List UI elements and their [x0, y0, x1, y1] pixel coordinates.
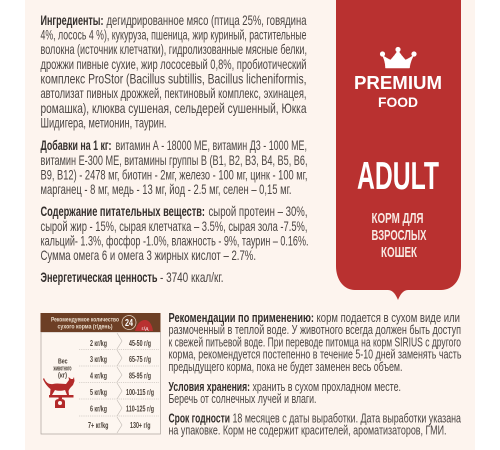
additives text: В9, В12) - 2478 мг, биотин - 2мг, железо - 100 мг, цинк - 100 мг,	[40, 166, 308, 182]
grams column: 85-95 г/g	[129, 370, 151, 380]
ingredients text: автолизат пивных дрожжей, пектиновый комплекс, эхинацея,	[40, 85, 306, 101]
usage recommendations	[168, 311, 462, 374]
left column label: Вес	[58, 356, 68, 366]
additives text: Добавки на 1 кг:	[40, 137, 112, 153]
ingredients text: дрожжи пивные сухие, жир лососевый 0,8%, пробиотический	[40, 56, 306, 72]
grams column: 65-75 г/g	[129, 354, 151, 364]
weight column	[88, 338, 108, 430]
header text: Рекомендуемое количество	[51, 316, 119, 324]
ingredients text: ромашка), клюква сушеная, сельдерей сушенный, Юкка	[40, 100, 307, 116]
usage recommendations: предыдущего корма, пока не будет заменен весь объем.	[168, 360, 402, 374]
additives text: марганец - 8 мг, медь - 13 мг, йод - 2.5 мг, селен – 0,15 мг.	[40, 181, 292, 197]
icon: 24 hours: 24	[125, 318, 133, 329]
feeding table: животного	[53, 364, 72, 372]
grams column: 45-50 г/g	[129, 338, 151, 348]
usage recommendations: Рекомендации по применению:	[168, 311, 314, 325]
shelf life: Срок годности	[168, 412, 230, 426]
additives text	[40, 137, 308, 197]
energy value text: - 3740 ккал/кг.	[160, 269, 224, 285]
ribbon shape	[336, 0, 461, 300]
table body	[41, 332, 160, 434]
storage conditions	[168, 380, 401, 406]
additives text: витамин А - 18000 МЕ, витамин Д3 - 1000 МЕ,	[116, 137, 307, 153]
table header	[40, 313, 160, 332]
ingredients text: комплекс ProStor (Bacillus subtillis, Bacillus licheniformis,	[40, 70, 306, 86]
ingredients text: Ингредиенты:	[40, 12, 104, 28]
chevrons	[117, 333, 122, 433]
subtitle	[372, 210, 426, 261]
grams column	[126, 338, 154, 430]
weight column: 3 кг/kg	[90, 354, 107, 364]
feeding table	[40, 313, 160, 434]
nutrients text: сырой жир - 15%, сырая клетчатка – 3.5%, сырая зола -7.5%,	[40, 218, 308, 234]
weight column: 4 кг/kg	[90, 370, 107, 380]
icon: food bowl: г/д	[142, 326, 149, 331]
storage conditions: Беречь от солнечных лучей и влаги.	[168, 392, 316, 406]
heading: ADULT: ADULT	[357, 155, 439, 198]
additives text: витамин Е-300 МЕ, витамины группы В (В1, В2, В3, В4, В5, В6,	[40, 152, 308, 168]
nutrients text: сырой протеин – 30%,	[208, 203, 308, 219]
nutrients text: Содержание питательных веществ:	[40, 203, 205, 219]
ingredients text: Шидигера, метионин, таурин.	[40, 114, 166, 130]
brand text	[354, 72, 442, 110]
brand text: FOOD	[378, 94, 418, 110]
icon: crown	[380, 47, 417, 68]
subtitle: КОШЕК	[381, 244, 418, 261]
storage conditions: Условия хранения:	[168, 380, 250, 394]
weight column: 7+ кг/kg	[88, 420, 108, 430]
row separators	[79, 350, 159, 416]
grams column: 130+ г/g	[130, 420, 150, 430]
shelf life	[168, 412, 461, 438]
ingredients text: 4%, лосось 4 %), кукуруза, пшеница, жир куриный, растительные	[40, 26, 307, 42]
red ribbon banner	[336, 0, 461, 300]
subtitle: ВЗРОСЛЫХ	[372, 227, 426, 244]
nutrients text: кальций- 1.3%, фосфор -1.0%, влажность - 9%, таурин – 0.16%.	[40, 232, 308, 248]
storage conditions: хранить в сухом прохладном месте.	[252, 380, 401, 394]
weight column: 5 кг/kg	[90, 387, 107, 397]
header text: сухого корма (г/день)	[58, 324, 112, 330]
header text	[51, 316, 119, 330]
weight column: 6 кг/kg	[90, 404, 107, 414]
nutrients text: Сумма омега 6 и омега 3 жирных кислот – 2.7%.	[40, 247, 256, 263]
left column label: (кг)	[58, 370, 67, 380]
icon: cat on scale	[43, 377, 74, 408]
ingredients text: волокна (источник клетчатки), гидролизованные мясные белки,	[40, 41, 307, 57]
left column label	[53, 356, 72, 380]
energy value text: Энергетическая ценность	[40, 269, 158, 285]
grams column: 110-125 г/g	[126, 404, 154, 414]
subtitle: КОРМ ДЛЯ	[372, 210, 424, 227]
ingredients text	[40, 12, 307, 130]
nutrients text	[40, 203, 308, 263]
brand text: PREMIUM	[354, 72, 442, 93]
weight column: 2 кг/kg	[90, 338, 107, 348]
ingredients text: дегидрированное мясо (птица 25%, говядина	[106, 12, 307, 28]
grams column: 100-115 г/g	[126, 387, 154, 397]
